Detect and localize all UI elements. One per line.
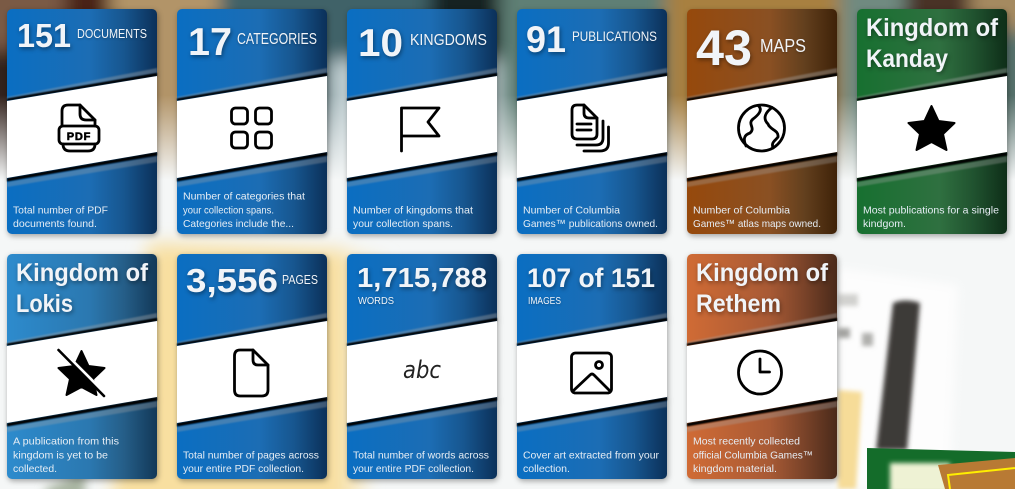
stat: 151 documents: DOCUMENTS	[77, 26, 147, 41]
stat: 107 of 151 images: 107 of 151	[527, 263, 655, 293]
description: categories: Categories include the...	[183, 218, 294, 230]
icon: filled star	[908, 106, 954, 150]
icon: pdf file: PDF	[67, 131, 91, 143]
icon: pdf file	[59, 105, 99, 151]
stat: 17 categories: CATEGORIES	[237, 31, 317, 48]
card: categories	[177, 9, 327, 234]
icon: flag	[402, 108, 439, 151]
description: documents: Total number of PDF	[13, 204, 108, 216]
stat: 1,715,788 words	[357, 262, 487, 307]
stat: 91 publications: 91	[526, 19, 566, 60]
stat: 3,556 pages: PAGES	[282, 273, 318, 287]
description: words: your entire PDF collection.	[353, 463, 474, 475]
description: categories: Number of categories that	[183, 190, 305, 202]
heading: kingdom of kanday: Kanday	[866, 45, 948, 73]
description: pages: Total number of pages across	[183, 450, 319, 462]
card: kingdom of rethem	[687, 254, 837, 479]
description: images: collection.	[523, 463, 570, 475]
stat: 107 of 151 images: IMAGES	[528, 295, 561, 307]
stat: 17 categories: 17	[188, 21, 232, 64]
card: images	[517, 254, 667, 479]
stat: 1,715,788 words: 1,715,788	[357, 262, 487, 293]
description: kanday: kindgom.	[863, 218, 906, 230]
card: kingdom of kanday	[857, 9, 1007, 234]
stat: 43 maps: MAPS	[760, 35, 806, 56]
stat: 10 kingdoms	[358, 22, 487, 65]
card: publications	[517, 9, 667, 234]
stat: 107 of 151 images	[527, 263, 655, 307]
description: kingdoms: your collection spans.	[353, 218, 453, 230]
description: publications: Number of Columbia	[523, 204, 620, 216]
stat: 10 kingdoms: KINGDOMS	[410, 32, 487, 49]
icon: clock	[738, 351, 782, 394]
icon: handwritten abc: abc	[403, 356, 441, 384]
description: publications: Games™ publications owned.	[523, 218, 658, 230]
stat: 10 kingdoms: 10	[358, 22, 403, 65]
stat: 3,556 pages	[186, 262, 318, 299]
book cover	[867, 448, 1015, 489]
icon: image	[572, 353, 612, 393]
description: pages: your entire PDF collection.	[183, 463, 304, 475]
description: rethem: official Columbia Games™	[693, 450, 813, 462]
description: maps: Games™ atlas maps owned.	[693, 218, 821, 230]
stat: 151 documents: 151	[17, 17, 71, 54]
description: rethem: kingdom material.	[693, 463, 777, 475]
icon: globe	[738, 105, 784, 151]
icon: blank page	[234, 350, 268, 396]
stat: 43 maps	[696, 20, 806, 76]
card: maps	[687, 9, 837, 234]
stat: 91 publications	[526, 19, 657, 60]
card: kingdoms	[347, 9, 497, 234]
heading: kingdom of rethem: Rethem	[696, 290, 781, 318]
description: maps: Number of Columbia	[693, 204, 790, 216]
description: documents: documents found.	[13, 218, 97, 230]
stat: 17 categories	[188, 21, 317, 64]
description: kingdoms: Number of kingdoms that	[353, 204, 473, 216]
description: categories: your collection spans.	[183, 204, 274, 216]
description: words: Total number of words across	[353, 450, 489, 462]
icon: crossed star	[58, 349, 106, 396]
heading: kingdom of lokis: Kingdom of	[16, 259, 149, 287]
description: rethem: Most recently collected	[693, 436, 800, 448]
description: lokis: collected.	[13, 463, 57, 475]
heading: kingdom of rethem: Kingdom of	[696, 259, 829, 287]
card: kingdom of lokis	[7, 254, 157, 479]
description: images: Cover art extracted from your	[523, 450, 660, 462]
card: documents	[7, 9, 157, 234]
icon: category grid	[232, 108, 272, 148]
stat: 3,556 pages: 3,556	[186, 262, 278, 299]
card: pages	[177, 254, 327, 479]
stat: 91 publications: PUBLICATIONS	[572, 29, 657, 44]
description: lokis: kingdom is yet to be	[13, 450, 108, 462]
stat: 151 documents	[17, 17, 147, 54]
stat: 1,715,788 words: WORDS	[358, 295, 394, 307]
description: kanday: Most publications for a single	[863, 204, 999, 216]
card: words	[347, 254, 497, 479]
description: lokis: A publication from this	[13, 436, 119, 448]
heading: kingdom of kanday: Kingdom of	[866, 14, 999, 42]
stat: 43 maps: 43	[696, 20, 752, 76]
heading: kingdom of lokis: Lokis	[16, 290, 73, 318]
icon: document stack	[572, 105, 608, 151]
